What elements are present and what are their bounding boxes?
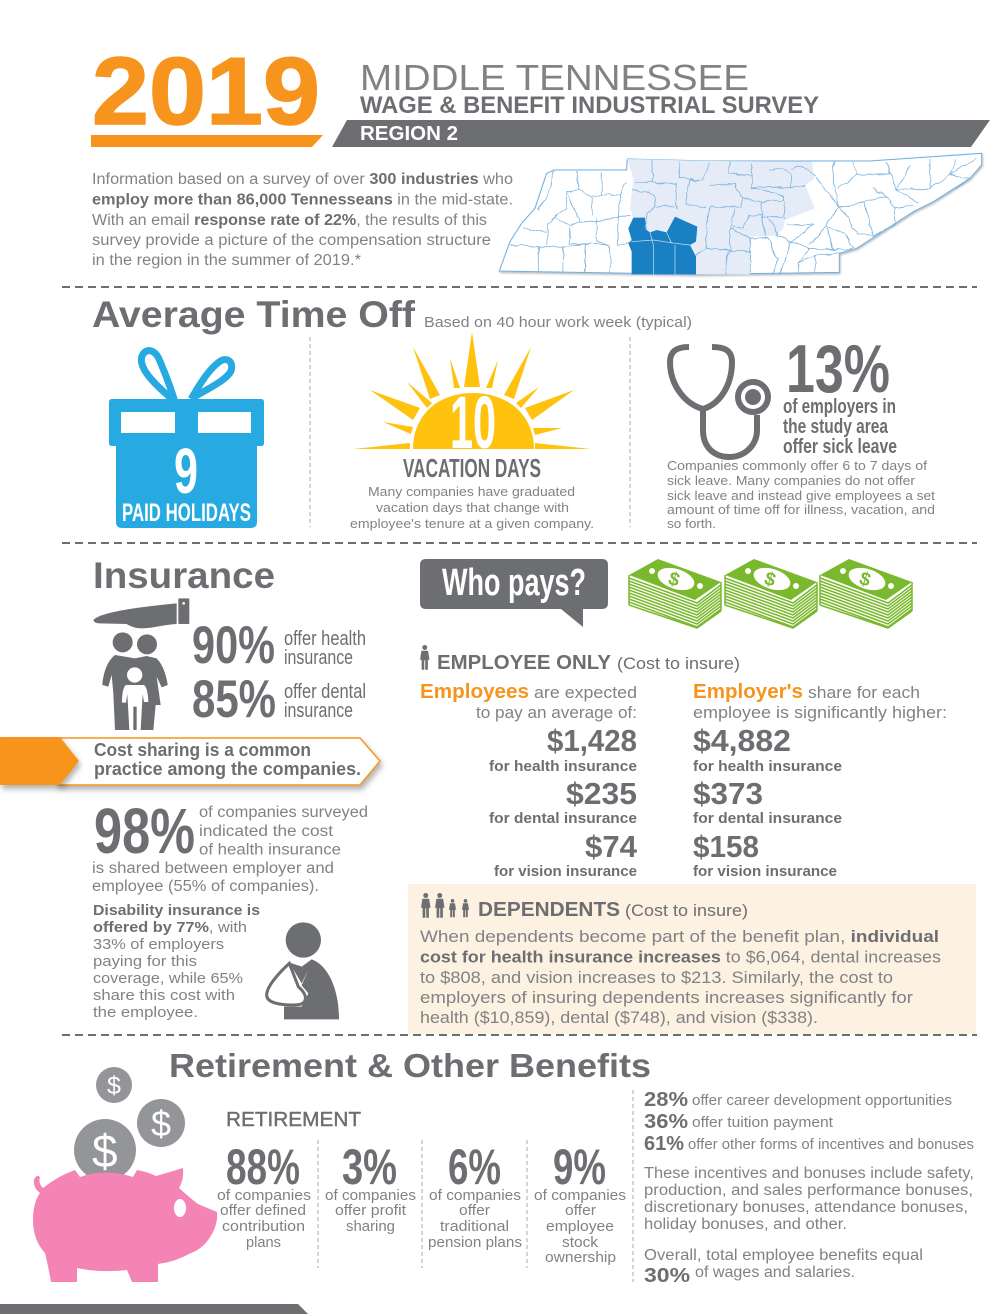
heading: survey title <box>360 57 819 119</box>
stat: profit sharing: 3% <box>342 1139 397 1195</box>
text: incentives description <box>644 1165 974 1233</box>
column: employee costs: for vision insurance <box>494 863 637 880</box>
text: disability insurance: Disability insurance is <box>93 902 260 919</box>
list: other benefits: 36% <box>644 1111 688 1133</box>
callout: cost sharing arrow <box>0 737 380 785</box>
column: employer costs: $373 <box>693 776 763 811</box>
icon: piggy bank with coins <box>33 1067 217 1282</box>
panel: paid holidays gift: 9 <box>174 435 198 507</box>
intro text: in the region in the summer of 2019.* <box>92 252 361 269</box>
panel: vacation days: Many companies have graduated <box>368 484 575 499</box>
stat: health insurance <box>192 616 366 675</box>
panel: dependents: (Cost to insure) <box>625 901 748 920</box>
icon: piggy bank with coins: $ <box>107 1072 121 1100</box>
stat: pension plans: traditional <box>440 1219 509 1235</box>
stat: 98 percent share cost: 98% <box>94 795 195 867</box>
panel: sick leave: 13% <box>786 331 890 407</box>
panel: vacation days: 10 <box>450 381 496 464</box>
icon: money stacks: $ <box>666 568 683 592</box>
text: total employee benefits: of wages and salaries. <box>695 1264 855 1281</box>
stat: dental insurance: insurance <box>284 700 353 722</box>
panel: vacation days: VACATION DAYS <box>403 453 541 483</box>
heading: survey title: WAGE & BENEFIT INDUSTRIAL SURVEY <box>360 92 819 119</box>
heading: average time off: Based on 40 hour work week (typical) <box>424 314 692 331</box>
map: Tennessee counties <box>499 153 982 274</box>
panel: sick leave: amount of time off for illness, vacation, and <box>667 502 935 517</box>
text: incentives description: discretionary bonuses, attendance bonuses, <box>644 1199 968 1216</box>
stat: profit sharing: of companies <box>325 1188 416 1204</box>
icon: gift <box>109 351 264 528</box>
stat: 98 percent share cost: indicated the cost <box>199 823 334 840</box>
stat: pension plans: of companies <box>429 1188 521 1204</box>
column: employee costs: for health insurance <box>489 758 637 775</box>
text: incentives description: These incentives and bonuses include safety, <box>644 1165 974 1182</box>
text: disability insurance: the employee. <box>93 1004 198 1021</box>
stat: defined contribution: 88% <box>226 1139 300 1195</box>
column: employer costs: $158 <box>693 829 759 864</box>
list: other benefits: offer tuition payment <box>692 1115 833 1131</box>
list: other benefits <box>644 1089 974 1155</box>
heading: retirement and other benefits: Retirement & Other Benefits <box>169 1047 651 1084</box>
icon: hand over family <box>93 598 189 730</box>
text: disability insurance: paying for this <box>93 953 197 970</box>
stat: profit sharing <box>325 1139 416 1235</box>
panel: sick leave: sick leave. Many companies do not offer <box>667 473 916 488</box>
stat: 98 percent share cost: of health insurance <box>199 842 341 858</box>
stat: stock ownership: of companies <box>534 1188 626 1204</box>
title: 2019: 2019 <box>92 38 320 145</box>
heading: employee only <box>420 645 740 674</box>
panel: sick leave <box>667 331 935 531</box>
column: employee costs: $74 <box>585 829 638 864</box>
panel: dependents: cost for health insurance increases to $6,064, dental increases <box>420 948 941 966</box>
panel: sick leave: the study area <box>783 416 889 438</box>
column: employee costs: are expected <box>534 683 637 702</box>
text: disability insurance: 33% of employers <box>93 936 224 953</box>
speech bubble: who pays: Who pays? <box>442 562 586 604</box>
list: other benefits: 28% <box>644 1089 688 1111</box>
panel: dependents <box>408 884 976 1034</box>
text: disability insurance: coverage, while 65% <box>93 970 243 987</box>
icon: money stacks: $ <box>762 568 779 592</box>
panel: sick leave: offer sick leave <box>783 436 897 458</box>
panel: sick leave: sick leave and instead give employees a set <box>667 488 935 503</box>
panel: dependents: When dependents become part of the benefit plan, individual <box>420 927 939 946</box>
icon: sun <box>353 332 591 449</box>
column: employer costs: $4,882 <box>693 723 791 758</box>
callout: cost sharing arrow: Cost sharing is a common <box>94 740 311 760</box>
stat: stock ownership: employee <box>546 1219 614 1235</box>
heading: average time off <box>92 294 692 335</box>
intro text <box>92 171 513 269</box>
panel: dependents: DEPENDENTS <box>478 899 620 921</box>
icon: piggy bank with coins: $ <box>92 1125 118 1177</box>
stat: stock ownership <box>534 1139 626 1266</box>
column: employee costs: Employees <box>420 681 529 703</box>
stat: dental insurance: 85% <box>192 670 276 729</box>
stat: pension plans: offer <box>459 1203 490 1219</box>
text: incentives description: production, and sales performance bonuses, <box>644 1182 973 1199</box>
intro text: With an email response rate of 22% , the results of this <box>92 212 487 229</box>
stat: stock ownership: offer <box>565 1203 596 1219</box>
panel: dependents: health ($10,859), dental ($748), and vision ($338). <box>420 1008 818 1027</box>
stat: profit sharing: offer profit <box>335 1203 406 1219</box>
panel: dependents: to $808, and vision increases to $213. Similarly, the cost to <box>420 968 893 987</box>
heading: employee only: (Cost to insure) <box>617 654 740 673</box>
stat: health insurance: 90% <box>192 616 275 675</box>
panel: paid holidays gift <box>109 351 264 528</box>
footer bar <box>0 1304 308 1314</box>
list: other benefits: offer career development opportunities <box>692 1093 952 1109</box>
stat: defined contribution: offer defined <box>220 1203 306 1219</box>
column: employer costs: Employer's <box>693 681 803 703</box>
panel: vacation days: employee's tenure at a given company. <box>350 516 594 531</box>
text: total employee benefits: 30% <box>644 1265 690 1287</box>
text: incentives description: holiday bonuses, and other. <box>644 1216 847 1233</box>
column: employer costs: for dental insurance <box>693 810 842 827</box>
stat: pension plans: pension plans <box>428 1235 522 1251</box>
icon: money stacks: $ <box>857 568 874 592</box>
subheading: retirement: RETIREMENT <box>226 1109 361 1131</box>
text: total employee benefits: Overall, total employee benefits equal <box>644 1247 923 1264</box>
text: disability insurance: share this cost with <box>93 987 235 1004</box>
stat: 98 percent share cost: employee (55% of companies). <box>92 878 319 895</box>
panel: dependents: employers of insuring dependents increases significantly for <box>420 988 913 1007</box>
icon: piggy bank with coins: $ <box>151 1103 171 1144</box>
panel: sick leave: of employers in <box>783 396 896 418</box>
column: employee costs: $235 <box>566 776 637 811</box>
stat: defined contribution: plans <box>246 1235 281 1251</box>
column: employer costs: share for each <box>808 683 920 702</box>
icon: person with arm sling <box>267 922 339 1019</box>
stat: stock ownership: 9% <box>553 1139 606 1195</box>
column: employer costs: employee is significantly higher: <box>693 703 947 722</box>
text: total employee benefits <box>644 1247 923 1287</box>
stat: stock ownership: stock <box>562 1235 599 1251</box>
heading: average time off: Average Time Off <box>92 294 416 335</box>
column: employee costs: to pay an average of: <box>476 703 637 722</box>
text: disability insurance <box>93 902 260 1021</box>
stat: pension plans: 6% <box>448 1139 501 1195</box>
column: employer costs: for health insurance <box>693 758 842 775</box>
stat: profit sharing: sharing <box>346 1219 395 1235</box>
stat: stock ownership: ownership <box>545 1250 616 1266</box>
stat: 98 percent share cost: is shared between employer and <box>92 860 334 877</box>
heading: survey title: MIDDLE TENNESSEE <box>360 57 749 98</box>
icon: money stacks <box>629 559 912 628</box>
callout: cost sharing arrow: practice among the companies. <box>94 759 361 779</box>
stat: 98 percent share cost <box>92 795 368 895</box>
panel: vacation days: vacation days that change with <box>376 500 569 515</box>
icon: stethoscope <box>670 347 768 457</box>
panel: vacation days <box>350 332 594 531</box>
list: other benefits: offer other forms of incentives and bonuses <box>688 1137 974 1153</box>
stat: pension plans <box>428 1139 522 1251</box>
intro text: survey provide a picture of the compensation structure <box>92 232 491 249</box>
panel: sick leave: so forth. <box>667 516 716 531</box>
stat: defined contribution: contribution <box>222 1219 305 1235</box>
stat: dental insurance: offer dental <box>284 681 366 703</box>
banner: region 2: REGION 2 <box>360 123 458 145</box>
panel: paid holidays gift: PAID HOLIDAYS <box>122 499 251 527</box>
stat: health insurance: insurance <box>284 647 353 669</box>
intro text: employ more than 86,000 Tennesseans in the mid-state. <box>92 192 513 208</box>
stat: 98 percent share cost: of companies surveyed <box>199 804 368 821</box>
stat: dental insurance <box>192 670 366 729</box>
column: employee costs: $1,428 <box>547 723 637 758</box>
heading: employee only: EMPLOYEE ONLY <box>437 652 612 674</box>
banner: region 2 <box>332 120 990 147</box>
heading: insurance: Insurance <box>93 555 275 596</box>
stat: defined contribution <box>217 1139 311 1251</box>
intro text: Information based on a survey of over 300 industries who <box>92 171 513 188</box>
stat: health insurance: offer health <box>284 628 366 650</box>
column: employer costs <box>693 681 947 880</box>
column: employee costs: for dental insurance <box>489 810 637 827</box>
panel: sick leave: Companies commonly offer 6 to 7 days of <box>667 458 927 473</box>
speech bubble: who pays <box>420 559 608 627</box>
text: disability insurance: offered by 77% , with <box>93 919 247 936</box>
column: employee costs <box>420 681 638 880</box>
list: other benefits: 61% <box>644 1133 684 1155</box>
column: employer costs: for vision insurance <box>693 863 837 880</box>
stat: defined contribution: of companies <box>217 1188 311 1204</box>
